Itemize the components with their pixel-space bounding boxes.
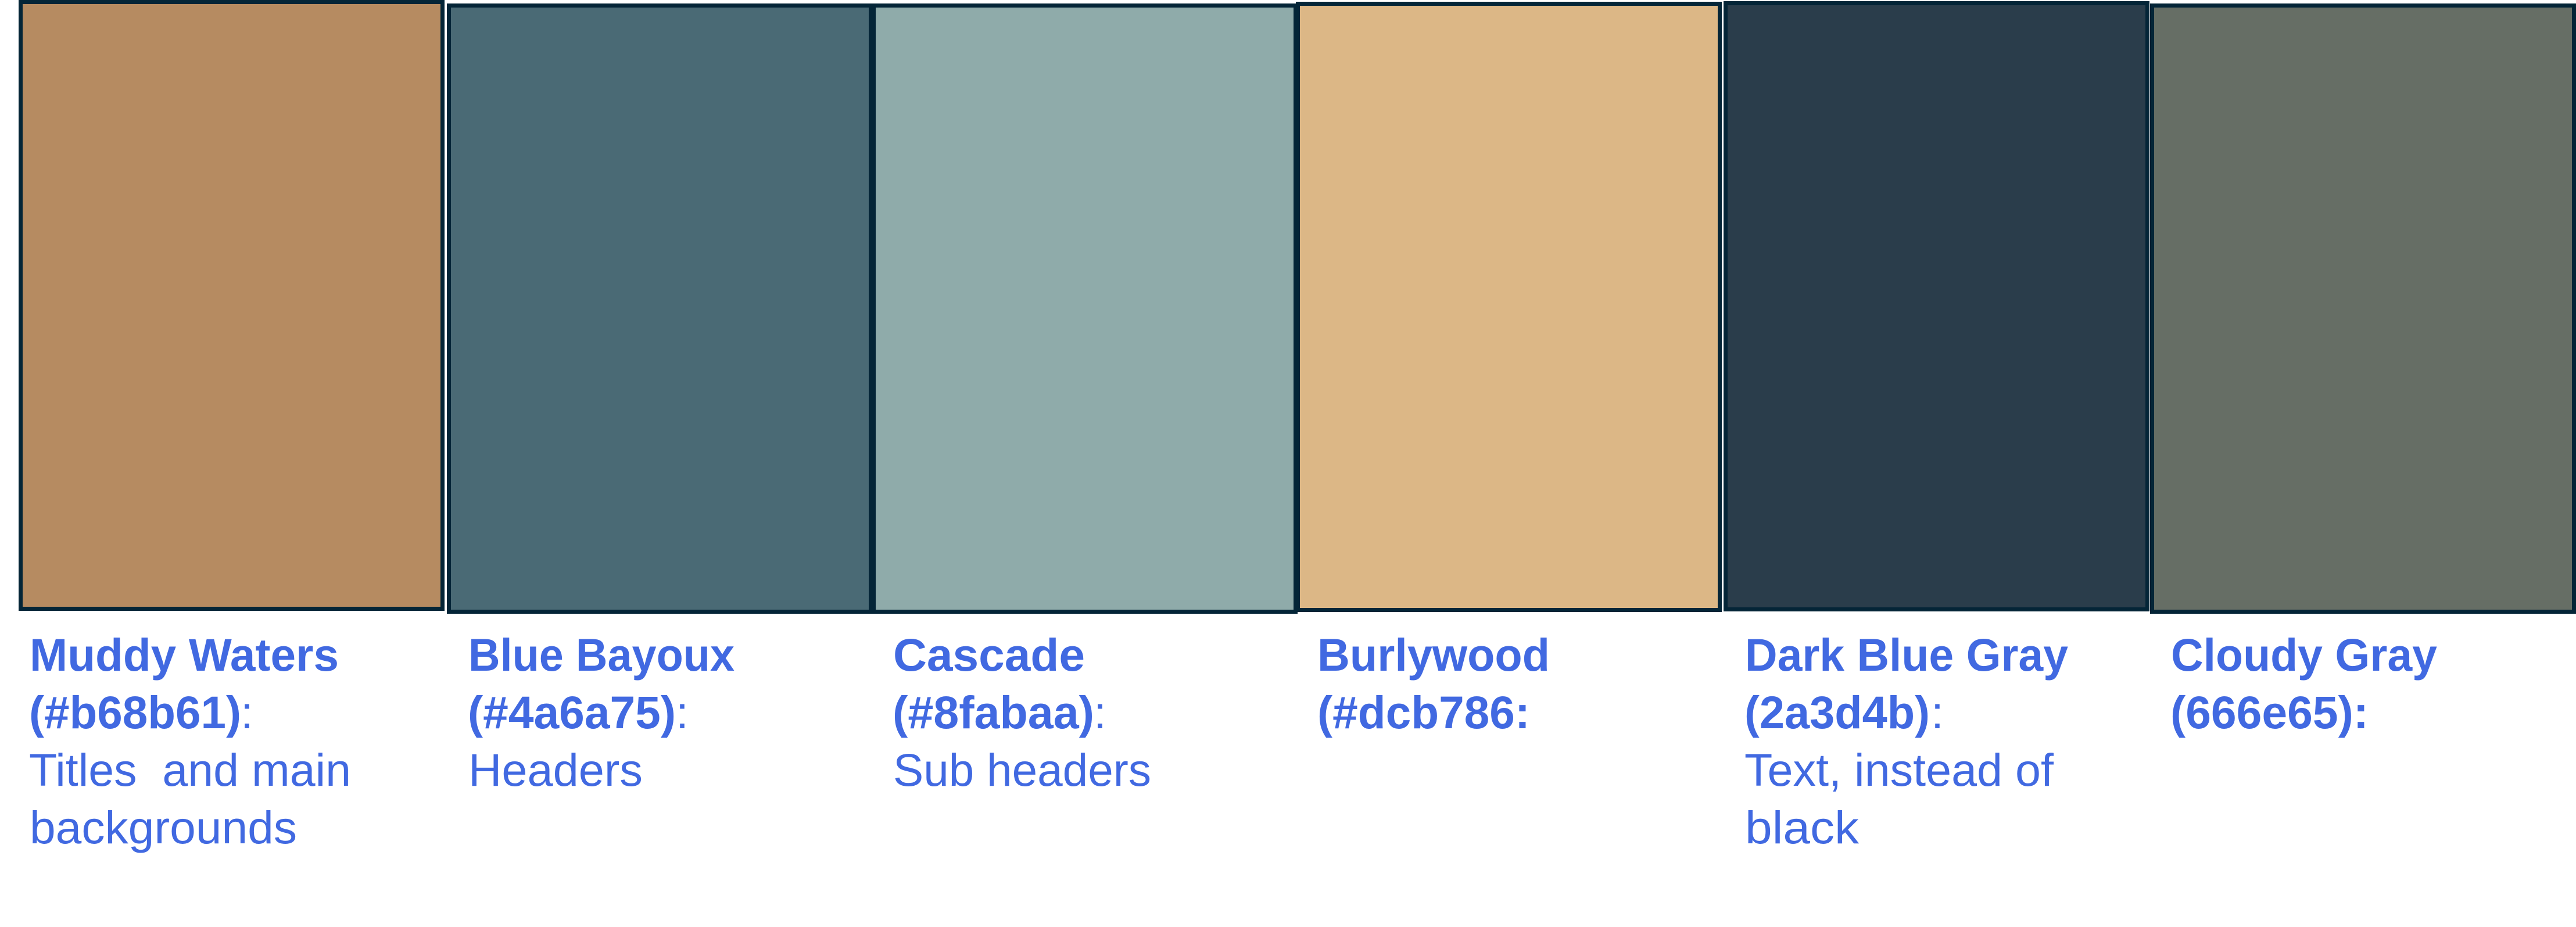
panel: Cascade <box>874 6 1296 796</box>
hex: 666e65: (666e65): <box>2170 686 2369 738</box>
name: Cloudy Gray: Cloudy Gray <box>2171 629 2437 681</box>
usage: Sub headers: Sub headers <box>893 744 1151 796</box>
panel: Blue Bayoux <box>449 6 870 796</box>
usage: Text, instead of: Text, instead of <box>1744 744 2054 796</box>
panel: Dark Blue Gray <box>1726 3 2148 853</box>
swatch: Burlywood <box>1298 3 1720 610</box>
hex: #8fabaa: (#8fabaa) <box>893 686 1094 738</box>
colon: : <box>676 686 689 738</box>
name: Muddy Waters: Muddy Waters <box>30 629 339 681</box>
colon: : <box>1931 686 1944 738</box>
colon: : <box>241 686 253 738</box>
usage: Headers: Headers <box>468 744 643 796</box>
name: Cascade: Cascade <box>893 629 1085 681</box>
usage: Titles and main: Titles and main <box>29 744 351 796</box>
name: Blue Bayoux: Blue Bayoux <box>468 629 735 681</box>
panel: Muddy Waters <box>21 2 443 853</box>
hex: #b68b61: (#b68b61) <box>29 686 241 738</box>
usage: backgrounds: backgrounds <box>30 801 297 853</box>
hex: 2a3d4b: (2a3d4b) <box>1744 686 1930 738</box>
hex: #4a6a75: (#4a6a75) <box>468 686 676 738</box>
panel: Burlywood <box>1298 3 1720 738</box>
swatch: Cloudy Gray <box>2152 6 2574 611</box>
hex: #dcb786: (#dcb786: <box>1317 686 1530 738</box>
swatch: Blue Bayoux <box>449 6 870 611</box>
panel: Cloudy Gray <box>2152 6 2574 738</box>
name: Burlywood: Burlywood <box>1317 629 1550 681</box>
swatch: Dark Blue Gray <box>1726 3 2148 609</box>
swatch: Cascade <box>874 6 1296 611</box>
name: Dark Blue Gray: Dark Blue Gray <box>1745 629 2068 681</box>
colon: : <box>1094 686 1106 738</box>
usage: black: black <box>1745 801 1860 853</box>
swatch: Muddy Waters <box>21 2 443 609</box>
